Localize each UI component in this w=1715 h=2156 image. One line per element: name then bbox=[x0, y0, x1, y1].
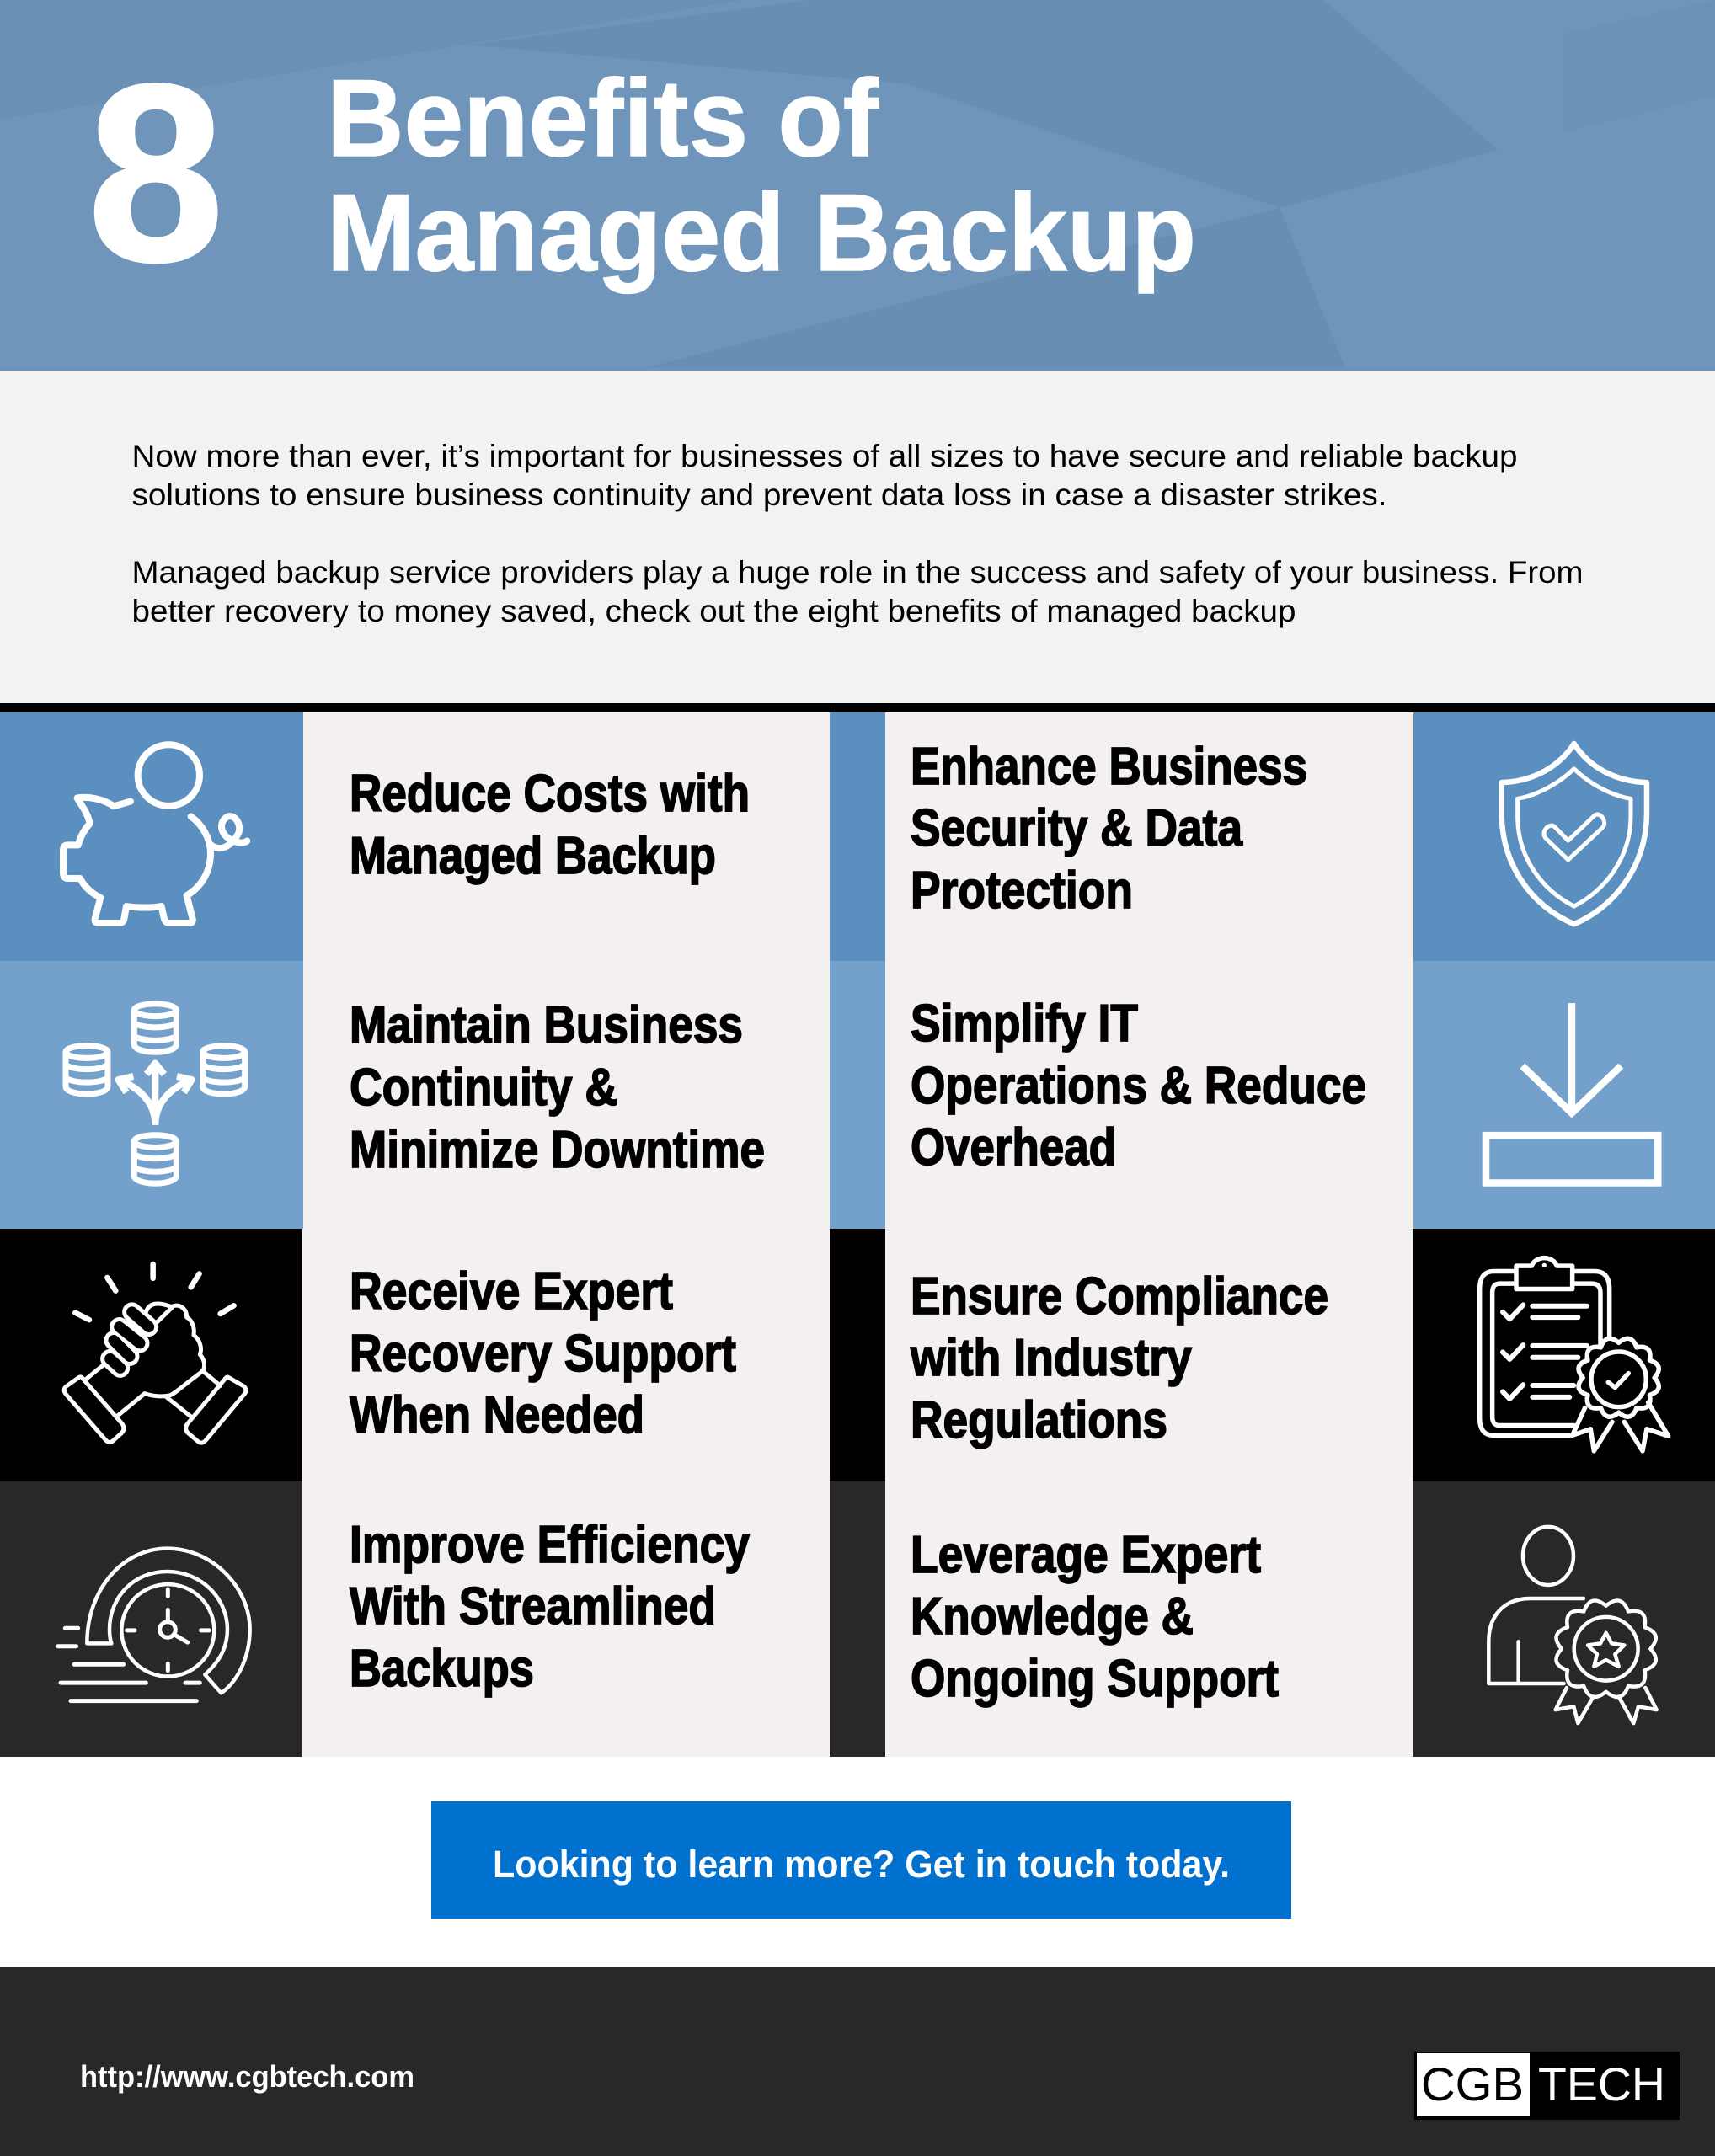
intro text: Managed backup service providers play a huge role in the success and safety of your business. From bbox=[131, 555, 1584, 590]
benefit: business continuity: Maintain Business bbox=[350, 996, 743, 1054]
benefit: compliance: Regulations bbox=[911, 1391, 1167, 1449]
icon: piggy bank bbox=[63, 744, 247, 923]
benefit: efficiency bbox=[350, 1516, 750, 1698]
benefit: security bbox=[911, 738, 1307, 920]
benefit: expert recovery: When Needed bbox=[350, 1386, 644, 1444]
benefit: expert knowledge: Knowledge & bbox=[911, 1588, 1194, 1646]
benefit: simplify IT: Overhead bbox=[911, 1118, 1116, 1177]
logo: CGB TECH bbox=[1414, 2052, 1680, 2120]
intro text: Now more than ever, it’s important for businesses of all sizes to have secure and reliable backup bbox=[131, 439, 1518, 473]
title bbox=[327, 56, 1196, 294]
big number 8: 8 bbox=[88, 31, 224, 314]
logo: CGB TECH: CGB bbox=[1421, 2057, 1524, 2111]
benefit: security: Protection bbox=[911, 862, 1133, 920]
icon: stopwatch speed bbox=[58, 1549, 250, 1701]
intro panel bbox=[0, 371, 1715, 703]
benefit: simplify IT: Simplify IT bbox=[911, 995, 1138, 1053]
benefit: efficiency: Improve Efficiency bbox=[350, 1516, 750, 1574]
benefit: compliance: Ensure Compliance bbox=[911, 1267, 1328, 1326]
benefit: simplify IT bbox=[911, 995, 1366, 1177]
benefit: simplify IT: Operations & Reduce bbox=[911, 1057, 1366, 1115]
intro text: better recovery to money saved, check out the eight benefits of managed backup bbox=[131, 594, 1296, 628]
logo: CGB TECH: TECH bbox=[1538, 2057, 1665, 2111]
call to action button: Looking to learn more? Get in touch today. bbox=[493, 1843, 1230, 1886]
icon: compliance clipboard bbox=[1480, 1258, 1669, 1451]
benefit: business continuity: Minimize Downtime bbox=[350, 1121, 765, 1179]
benefit: security: Security & Data bbox=[911, 799, 1242, 857]
benefit: compliance: with Industry bbox=[910, 1329, 1192, 1387]
benefit: reduce costs bbox=[350, 765, 750, 885]
panel: left text column bbox=[302, 712, 830, 1757]
benefit: expert knowledge: Ongoing Support bbox=[911, 1650, 1279, 1708]
title: Managed Backup bbox=[327, 171, 1196, 294]
header banner bbox=[0, 0, 1715, 371]
benefit: expert knowledge: Leverage Expert bbox=[911, 1526, 1261, 1584]
benefit: efficiency: Backups bbox=[350, 1640, 534, 1698]
icon: databases with arrows bbox=[66, 1004, 245, 1183]
intro text bbox=[131, 439, 1584, 628]
panel: right text column bbox=[885, 712, 1413, 1757]
call to action button bbox=[431, 1801, 1291, 1919]
benefit: reduce costs: Reduce Costs with bbox=[350, 765, 750, 823]
icon: download arrow bbox=[1486, 1003, 1658, 1182]
icon: handshake bbox=[64, 1264, 246, 1443]
benefit: security: Enhance Business bbox=[911, 738, 1307, 796]
footer url: http://www.cgbtech.com bbox=[80, 2059, 414, 2094]
icon: expert with badge bbox=[1488, 1527, 1657, 1723]
benefit: expert recovery: Recovery Support bbox=[350, 1325, 736, 1383]
row backgrounds bbox=[0, 712, 1715, 1757]
intro text: solutions to ensure business continuity and prevent data loss in case a disaster strikes. bbox=[131, 478, 1386, 512]
benefit: expert knowledge bbox=[911, 1526, 1279, 1708]
benefit: expert recovery bbox=[350, 1262, 736, 1444]
benefit: business continuity: Continuity & bbox=[350, 1059, 617, 1117]
title: Benefits of bbox=[327, 56, 879, 179]
benefit: compliance bbox=[910, 1267, 1328, 1449]
footer bbox=[0, 1967, 1715, 2156]
benefit: business continuity bbox=[350, 996, 765, 1179]
benefit: efficiency: With Streamlined bbox=[350, 1577, 716, 1636]
benefit: expert recovery: Receive Expert bbox=[350, 1262, 673, 1321]
divider bar bbox=[0, 703, 1715, 712]
icon: shield check bbox=[1502, 744, 1647, 924]
benefit: reduce costs: Managed Backup bbox=[350, 827, 716, 885]
